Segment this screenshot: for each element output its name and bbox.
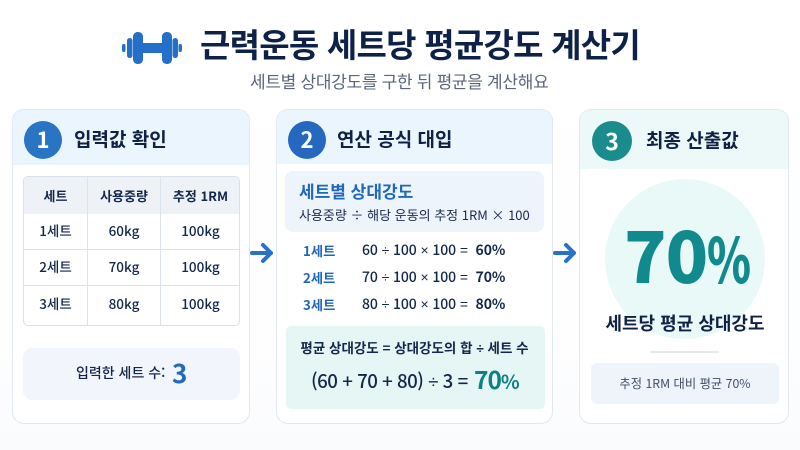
result value: 70 (624, 203, 707, 304)
input table: 80kg (109, 293, 139, 313)
input set count box (23, 348, 240, 400)
calculation rows: 70 ÷ 100 × 100 = 70% (362, 267, 505, 287)
panel: step 2 formula (276, 109, 553, 424)
input table: 1세트 (39, 220, 72, 240)
input table: 2세트 (39, 256, 72, 276)
title: 근력운동 세트당 평균강도 계산기 (200, 19, 640, 67)
set count label: 입력한 세트 수: (76, 363, 165, 383)
result label: 세트당 평균 상대강도 (605, 310, 765, 336)
arrow: step 1 to step 2 (250, 242, 274, 264)
calculation rows: 80 ÷ 100 × 100 = 80% (362, 294, 505, 314)
panel: step 1 input values (12, 109, 250, 424)
note box (591, 363, 779, 404)
result value: % (707, 211, 751, 301)
step number 1: 1 (36, 123, 49, 155)
divider (650, 351, 719, 353)
formula text: 사용중량 ÷ 해당 운동의 추정 1RM × 100 (299, 205, 530, 224)
step number 2 (288, 121, 326, 159)
calculation rows: 3세트 (303, 295, 335, 314)
input table: 3세트 (39, 293, 72, 313)
input table (23, 176, 240, 326)
step number 3 (592, 121, 632, 161)
input table: 100kg (181, 293, 220, 313)
calculation rows (303, 240, 505, 314)
input table: 100kg (181, 220, 220, 240)
step number 1 (24, 121, 62, 159)
icon: dumbbell (122, 32, 182, 64)
arrow: step 2 to step 3 (553, 242, 576, 264)
input table: 100kg (181, 256, 220, 276)
input table: 사용중량 (100, 186, 148, 205)
panel: step 3 result (579, 109, 789, 424)
note text: 추정 1RM 대비 평균 70% (619, 374, 751, 392)
input table: 세트 (44, 186, 67, 205)
input table: 70kg (109, 256, 139, 276)
input table: 추정 1RM (173, 186, 228, 205)
heading: final result: 최종 산출값 (646, 126, 739, 153)
calculation rows: 1세트 (303, 241, 335, 260)
result value (624, 203, 751, 304)
heading: input values: 입력값 확인 (74, 125, 167, 152)
calculation rows: 60 ÷ 100 × 100 = 60% (362, 240, 505, 260)
panel header: step 2 (277, 110, 554, 164)
step number 3: 3 (605, 123, 619, 157)
average result box (286, 326, 545, 409)
result circle (605, 179, 765, 339)
formula box (285, 171, 544, 232)
set count value: 3 (172, 354, 187, 391)
subtitle: 세트별 상대강도를 구한 뒤 평균을 계산해요 (250, 68, 548, 93)
calculation rows: 2세트 (303, 268, 335, 287)
step number 2: 2 (300, 123, 313, 155)
average formula: 평균 상대강도 = 상대강도의 합 ÷ 세트 수 (300, 337, 529, 357)
panel header: step 1 (13, 110, 251, 165)
average calculation: (60 + 70 + 80) ÷ 3 = (311, 367, 468, 394)
panel header: step 3 (580, 110, 790, 169)
average result: 70% (474, 362, 519, 397)
input table: 60kg (109, 220, 139, 240)
heading: formula: 연산 공식 대입 (337, 125, 453, 152)
formula title: 세트별 상대강도 (299, 178, 413, 203)
